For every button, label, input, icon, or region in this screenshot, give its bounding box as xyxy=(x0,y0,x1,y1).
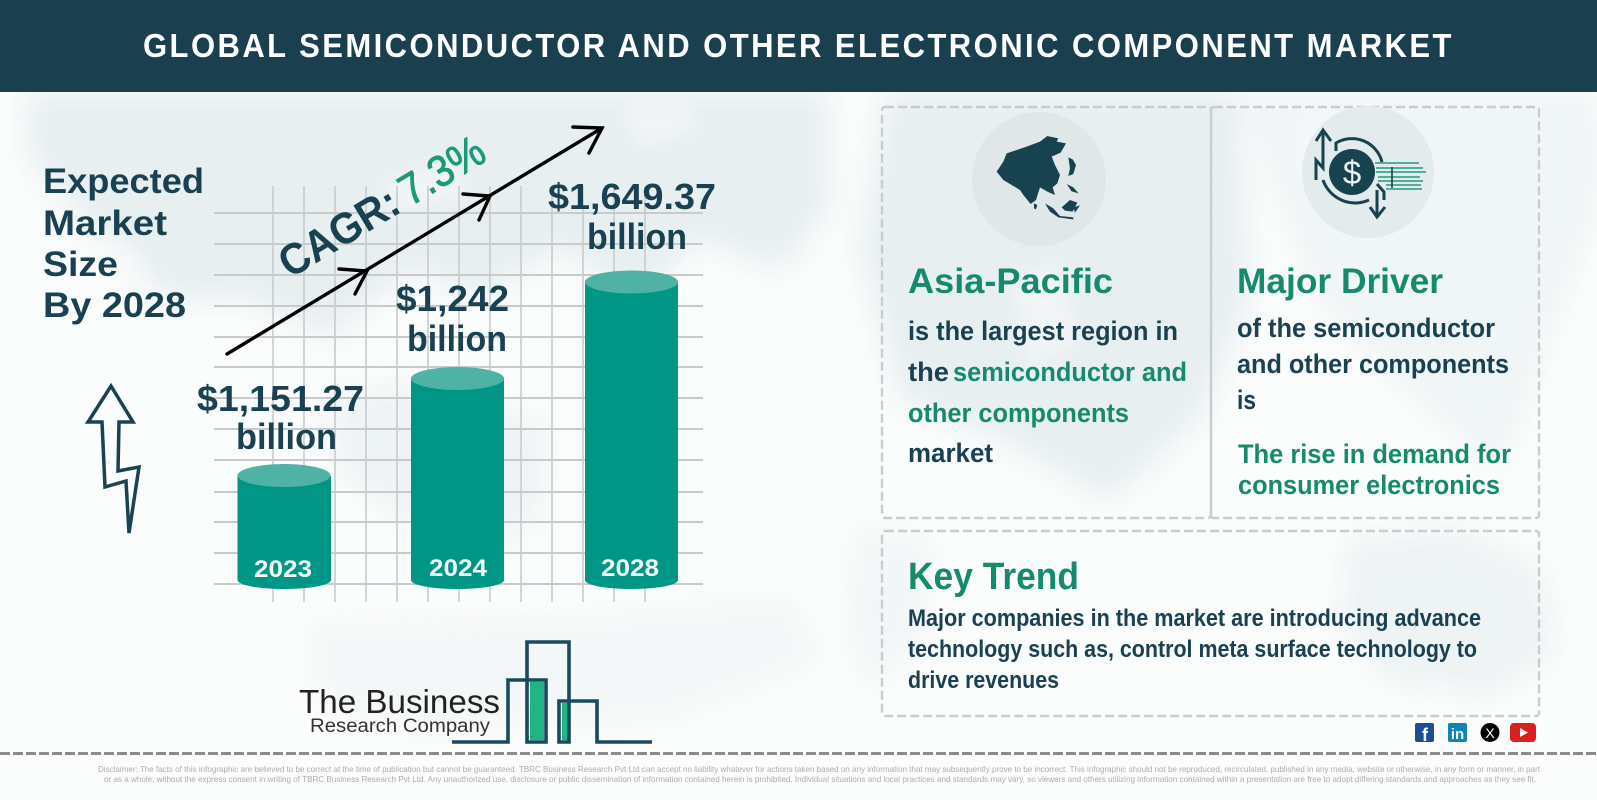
text: trend description xyxy=(908,605,1481,694)
text: region description: is the largest region in xyxy=(908,316,1178,346)
heading: Key Trend: Key Trend xyxy=(908,556,1079,598)
icon: dollar cycle xyxy=(1302,106,1434,238)
bar 2024: 2024 xyxy=(429,555,488,582)
text: driver description: and other components xyxy=(1237,349,1509,379)
growth arrow xyxy=(227,127,602,354)
icon: LinkedIn: in xyxy=(1451,726,1464,743)
title: GLOBAL SEMICONDUCTOR AND OTHER ELECTRONIC COMPONENT MARKET xyxy=(143,27,1452,64)
bar 2028 xyxy=(585,270,678,589)
icon: X: X xyxy=(1485,725,1495,741)
logo: The Business Research Company xyxy=(299,642,652,742)
text: driver description: is xyxy=(1237,385,1256,415)
bar 2023 xyxy=(238,464,331,589)
icon: Facebook: f xyxy=(1422,725,1429,745)
heading: Asia-Pacific: Asia-Pacific xyxy=(908,262,1113,301)
value label 2028: billion xyxy=(587,216,687,257)
value label 2028: $1,649.37 xyxy=(548,176,716,217)
disclaimer: or as a whole, without the express consent in writing of TBRC Business Research Pvt Ltd. Any unauthorized use, disclosure or public dissemination of information contained herein is prohibited. Individual situations and local practices and standards may vary, so viewers and others utilizing information contained within a presentation are free to adopt differing standards and approaches as they see fit. xyxy=(104,774,1536,784)
value label 2024: $1,242 xyxy=(396,278,509,319)
heading: expected market size: Size xyxy=(43,245,118,284)
text: region description: semiconductor and xyxy=(953,357,1187,387)
disclaimer xyxy=(98,764,1541,784)
text: trend description: Major companies in the market are introducing advance xyxy=(908,605,1481,632)
logo: The Business Research Company: Research Company xyxy=(310,716,491,737)
icon: dollar cycle: $ xyxy=(1343,154,1361,191)
chart grid xyxy=(214,186,703,602)
bar chart xyxy=(238,270,678,589)
text: region description: market xyxy=(908,438,993,468)
text: driver highlight: consumer electronics xyxy=(1238,470,1500,500)
text: region description: other components xyxy=(908,398,1129,428)
text: trend description: technology such as, control meta surface technology to xyxy=(908,636,1477,663)
value label 2023: $1,151.27 xyxy=(197,378,364,419)
value label 2028 xyxy=(548,176,716,257)
CAGR label: 7.3% xyxy=(390,126,494,215)
bar 2024 xyxy=(411,367,504,589)
heading: expected market size: Market xyxy=(43,204,167,243)
text: region description: the xyxy=(908,357,949,387)
heading: Major Driver: Major Driver xyxy=(1237,262,1443,301)
text: driver description: of the semiconductor xyxy=(1237,313,1495,343)
panel: Key Trend xyxy=(882,531,1539,716)
value label 2024: billion xyxy=(407,318,507,359)
panel: Asia-Pacific xyxy=(882,107,1211,518)
social icons xyxy=(1415,723,1536,745)
bar 2028: 2028 xyxy=(601,555,659,582)
icon: YouTube xyxy=(1510,723,1536,742)
value label 2023: billion xyxy=(236,416,337,457)
footer divider xyxy=(0,752,1597,755)
heading: expected market size: Expected xyxy=(43,162,204,201)
icon: lightning up arrow xyxy=(88,386,139,533)
CAGR label xyxy=(270,126,494,288)
value label 2024 xyxy=(396,278,509,359)
CAGR label: CAGR: xyxy=(270,178,408,288)
logo: The Business Research Company: The Business xyxy=(299,683,500,720)
header bar xyxy=(0,0,1597,92)
text: driver description xyxy=(1237,313,1509,415)
heading: expected market size: By 2028 xyxy=(43,286,186,325)
text: driver highlight xyxy=(1238,439,1511,500)
text: driver highlight: The rise in demand for xyxy=(1238,439,1511,469)
bar 2023: 2023 xyxy=(254,556,312,583)
value label 2023 xyxy=(197,378,364,457)
panel: Major Driver xyxy=(1211,106,1539,518)
icon: Asia map xyxy=(972,112,1106,246)
heading: expected market size xyxy=(43,162,204,325)
text: region description xyxy=(908,316,1187,468)
text: trend description: drive revenues xyxy=(908,667,1059,694)
disclaimer: Disclaimer: The facts of this infographic are believed to be correct at the time of publication but cannot be guaranteed. TBRC Business Research Pvt Ltd can accept no liability whatever for actions taken based on any information that may subsequently prove to be incorrect. This infographic should not be reproduced, recirculated, published in any media, website or otherwise, in any form or manner, in part xyxy=(98,764,1541,774)
